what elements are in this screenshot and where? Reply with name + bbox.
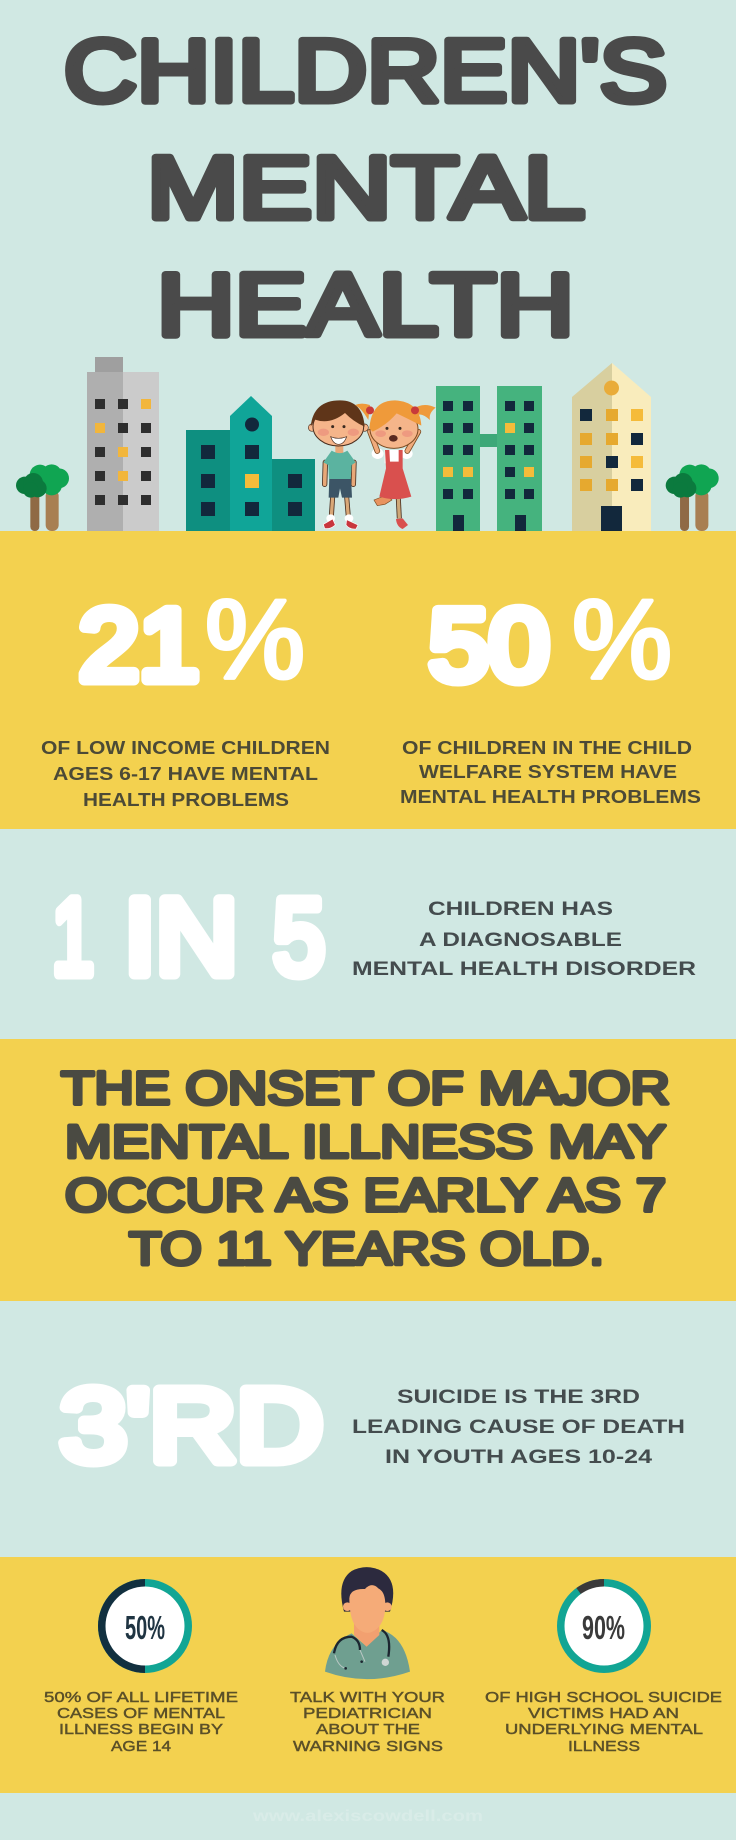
panel: low income and child welfare stats <box>0 531 736 829</box>
caption: low income children: HEALTH PROBLEMS <box>83 790 289 810</box>
title <box>64 21 667 354</box>
text: onset statement: TO 11 YEARS OLD. <box>129 1222 604 1274</box>
caption: suicide victims: OF HIGH SCHOOL SUICIDE <box>485 1689 722 1706</box>
caption: pediatrician: PEDIATRICIAN <box>303 1705 432 1722</box>
title: MENTAL <box>147 138 585 237</box>
icon: cream building <box>572 363 651 533</box>
caption: suicide victims: UNDERLYING MENTAL <box>505 1721 703 1738</box>
caption: lifetime cases: 50% OF ALL LIFETIME <box>44 1689 238 1706</box>
stat: 21%: 21 <box>79 590 199 702</box>
stat: 50%: 50 <box>429 590 549 702</box>
icon: teal building <box>186 396 315 531</box>
stat: 1 in 5: IN <box>124 876 238 997</box>
stat: 50% <box>429 577 672 702</box>
icon: doctor <box>325 1567 410 1679</box>
chart: 90% ring <box>557 1579 651 1673</box>
panel: bottom facts <box>0 1557 736 1793</box>
caption: pediatrician <box>290 1689 445 1755</box>
text: onset statement: OCCUR AS EARLY AS 7 <box>65 1169 666 1221</box>
icon: green H building <box>436 386 542 531</box>
icon: gray tower <box>87 357 159 531</box>
title: CHILDREN'S <box>64 21 667 120</box>
chart: 90% ring: 90% <box>582 1609 625 1646</box>
caption: low income children: OF LOW INCOME CHILDREN <box>41 738 330 758</box>
text: diagnosable disorder <box>352 899 696 980</box>
icon: girl <box>355 400 436 529</box>
chart: 50% ring <box>98 1579 192 1673</box>
caption: low income children <box>41 738 330 810</box>
text: diagnosable disorder: MENTAL HEALTH DISORDER <box>352 959 696 980</box>
caption: child welfare system <box>400 738 701 807</box>
caption: lifetime cases: CASES OF MENTAL <box>57 1705 225 1722</box>
text: onset statement: THE ONSET OF MAJOR <box>61 1062 670 1114</box>
stat: 1 in 5: 1 <box>52 876 94 997</box>
text: suicide statement: LEADING CAUSE OF DEATH <box>352 1417 685 1438</box>
text: suicide statement: IN YOUTH AGES 10-24 <box>385 1447 653 1468</box>
text: diagnosable disorder: A DIAGNOSABLE <box>419 930 622 951</box>
caption: child welfare system: MENTAL HEALTH PROBLEMS <box>400 787 701 807</box>
caption: pediatrician: TALK WITH YOUR <box>290 1689 445 1706</box>
stat: 1 in 5 <box>52 876 325 997</box>
caption: suicide victims: VICTIMS HAD AN <box>528 1705 679 1722</box>
chart: 50% ring: 50% <box>125 1609 165 1646</box>
stat: 21%: % <box>205 577 305 702</box>
caption: lifetime cases <box>44 1689 238 1755</box>
text: suicide statement <box>352 1387 685 1468</box>
icon: trees right <box>666 464 719 531</box>
caption: pediatrician: ABOUT THE <box>316 1721 420 1738</box>
text: suicide statement: SUICIDE IS THE 3RD <box>397 1387 640 1408</box>
text: onset statement: MENTAL ILLNESS MAY <box>65 1116 666 1168</box>
icon: trees left <box>16 464 69 531</box>
caption: suicide victims <box>485 1689 722 1755</box>
icon: boy <box>308 400 368 529</box>
text: diagnosable disorder: CHILDREN HAS <box>428 899 613 920</box>
text: onset statement <box>61 1062 670 1274</box>
panel: onset of illness <box>0 1039 736 1301</box>
caption: child welfare system: OF CHILDREN IN THE CHILD <box>402 738 692 758</box>
caption: lifetime cases: AGE 14 <box>111 1738 171 1755</box>
caption: lifetime cases: ILLNESS BEGIN BY <box>59 1721 223 1738</box>
stat: 3'RD: 3'RD <box>60 1368 323 1483</box>
footer: website: www.alexiscowdell.com <box>252 1808 483 1825</box>
caption: low income children: AGES 6-17 HAVE MENTAL <box>53 764 318 784</box>
caption: pediatrician: WARNING SIGNS <box>293 1738 443 1755</box>
stat: 50%: % <box>572 577 672 702</box>
stat: 21% <box>79 577 305 702</box>
caption: suicide victims: ILLNESS <box>568 1738 640 1755</box>
caption: child welfare system: WELFARE SYSTEM HAVE <box>419 762 677 782</box>
title: HEALTH <box>157 255 574 354</box>
stat: 1 in 5: 5 <box>273 876 325 997</box>
